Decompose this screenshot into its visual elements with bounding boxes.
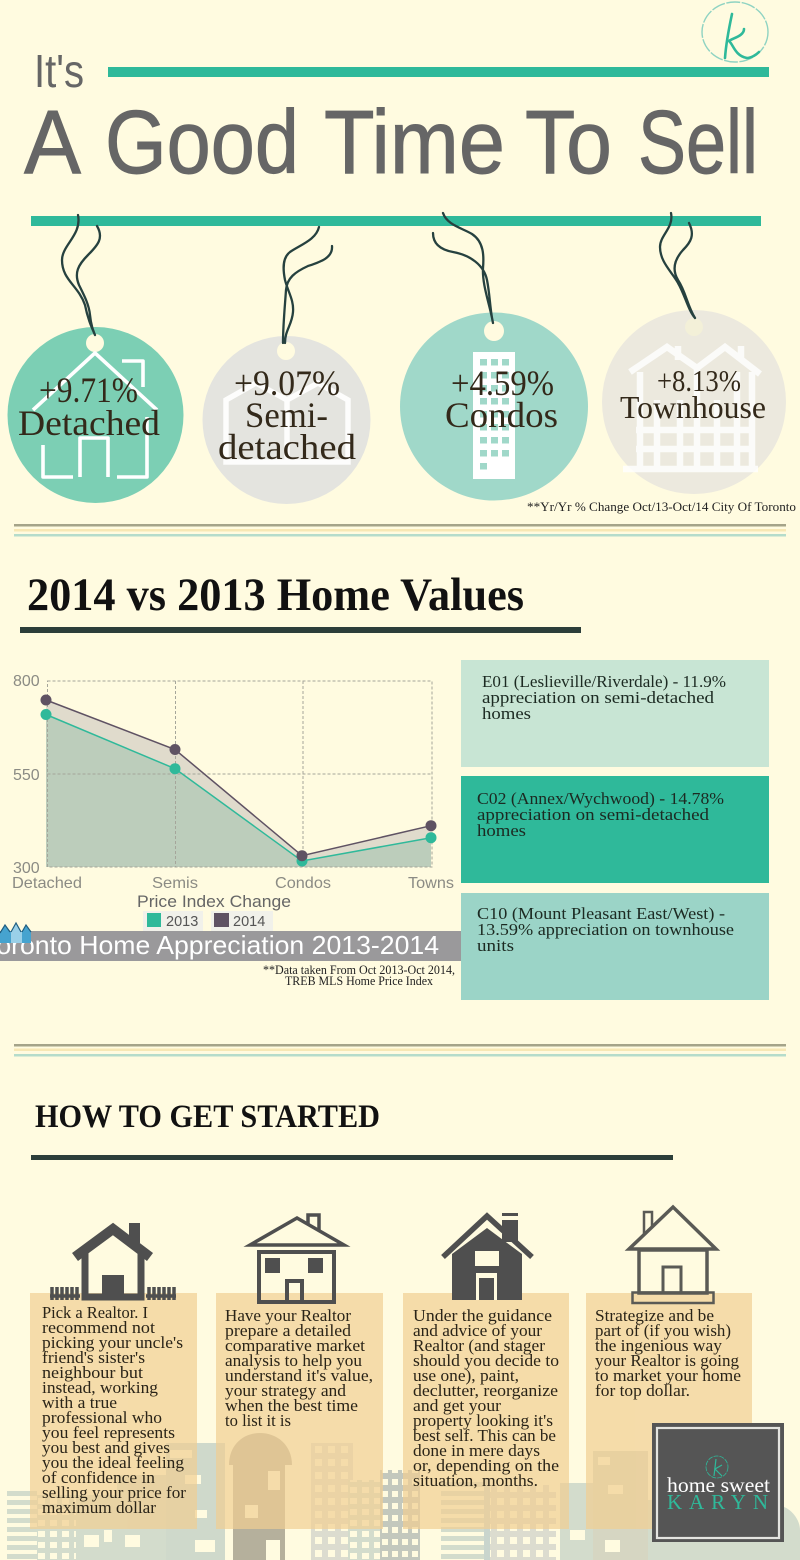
step 3 text: best self. This can be bbox=[413, 1426, 556, 1445]
step 3 text: or, depending on the bbox=[413, 1456, 559, 1475]
x axis labels: Condos bbox=[275, 875, 331, 892]
tag label bbox=[218, 363, 356, 467]
step 1 text: you feel represents bbox=[42, 1423, 175, 1442]
step 4 text: to market your home bbox=[595, 1366, 741, 1385]
step 1 text: you the ideal feeling bbox=[42, 1453, 185, 1472]
step 1 text: with a true bbox=[42, 1393, 117, 1412]
icon: townhouse row bbox=[623, 346, 760, 469]
line 2014 bbox=[46, 700, 431, 856]
legend: 2013 bbox=[166, 914, 198, 930]
step 4 text: part of (if you wish) bbox=[595, 1321, 731, 1340]
step 1 text: of confidence in bbox=[42, 1468, 156, 1487]
title: It's: It's bbox=[34, 45, 84, 97]
icon: small blue houses bbox=[0, 923, 31, 943]
logo box: home sweet Karyn bbox=[652, 1423, 784, 1542]
tag hole bbox=[86, 334, 104, 352]
step 1 text: professional who bbox=[42, 1408, 162, 1427]
title: A Good Time To Sell: Time bbox=[324, 93, 505, 193]
panel: E01: homes bbox=[482, 704, 531, 723]
step 3 text: use one), paint, bbox=[413, 1366, 519, 1385]
tag string bbox=[62, 215, 100, 335]
small k logo bbox=[706, 1456, 728, 1478]
step 4 text: the ingenious way bbox=[595, 1336, 723, 1355]
heading: How To Get Started: HOW TO GET STARTED bbox=[35, 1099, 380, 1135]
step 4 text: for top dollar. bbox=[595, 1381, 690, 1400]
step 1 text: selling your price for bbox=[42, 1483, 186, 1502]
footnote: year over year: **Yr/Yr % Change Oct/13-Oct/14 City Of Toronto bbox=[527, 500, 796, 514]
panel: C10: units bbox=[477, 936, 514, 955]
tag label: Semi- bbox=[245, 395, 328, 435]
step 1 text bbox=[42, 1303, 186, 1517]
step 2 text: Have your Realtor bbox=[225, 1306, 351, 1325]
step 1 text: Pick a Realtor. I bbox=[42, 1303, 148, 1322]
step 2 text: understand it's value, bbox=[225, 1366, 373, 1385]
tag hole bbox=[484, 321, 504, 341]
panel: C10: C10 (Mount Pleasant East/West) - bbox=[477, 904, 725, 923]
chart title: Price Index Change bbox=[137, 892, 291, 911]
legend bbox=[143, 911, 273, 931]
title: A Good Time To Sell: Good bbox=[105, 93, 299, 193]
tag disc bbox=[602, 310, 786, 494]
panel: C02: appreciation on semi-detached bbox=[477, 805, 710, 824]
step 1 text: instead, working bbox=[42, 1378, 159, 1397]
step panels backgrounds bbox=[30, 1293, 752, 1529]
step 2 text: when the best time bbox=[225, 1396, 358, 1415]
tag label bbox=[18, 370, 160, 443]
tag string bbox=[433, 213, 493, 323]
step 3 text: done in mere days bbox=[413, 1441, 540, 1460]
tag hole bbox=[685, 318, 703, 336]
y axis labels: 550 bbox=[13, 767, 40, 784]
y axis labels bbox=[13, 673, 40, 877]
icon: semi-detached house bbox=[226, 383, 348, 462]
points 2013 bbox=[40, 709, 436, 866]
heading rule bbox=[31, 1155, 673, 1160]
heading: 2014 vs 2013 Home Values: 2014 vs 2013 Home Values bbox=[27, 569, 524, 621]
footnote: data source: **Data taken From Oct 2013-Oct 2014, bbox=[263, 963, 455, 977]
title: A Good Time To Sell: Sell bbox=[638, 93, 758, 193]
panel: C02: C02 (Annex/Wychwood) - 14.78% bbox=[477, 789, 724, 808]
step 3 text bbox=[413, 1306, 559, 1490]
tag disc bbox=[400, 312, 588, 500]
icon: outlined house bbox=[629, 1207, 716, 1303]
footnote: data source: TREB MLS Home Price Index bbox=[285, 974, 434, 988]
icon: house with windows bbox=[250, 1215, 344, 1302]
step 4 text: your Realtor is going bbox=[595, 1351, 740, 1370]
points 2014 bbox=[40, 694, 436, 861]
tag label: Detached bbox=[18, 403, 160, 443]
step 3 text: declutter, reorganize bbox=[413, 1381, 558, 1400]
step 3 text: should you decide to bbox=[413, 1351, 559, 1370]
legend: 2014 bbox=[233, 914, 265, 930]
logo: k monogram bbox=[702, 2, 768, 62]
title rule bottom bbox=[31, 216, 761, 226]
step 2 text: your strategy and bbox=[225, 1381, 347, 1400]
title: A Good Time To Sell: To bbox=[525, 93, 612, 193]
tag label: Townhouse bbox=[620, 389, 766, 425]
price tag: detached bbox=[8, 215, 184, 503]
step 2 text: comparative market bbox=[225, 1336, 365, 1355]
heading rule bbox=[20, 627, 581, 633]
title rule top bbox=[108, 67, 769, 77]
step 1 text: maximum dollar bbox=[42, 1498, 156, 1517]
icon: solid house bbox=[443, 1213, 532, 1300]
x axis labels bbox=[12, 875, 454, 892]
panel: C02 bbox=[461, 776, 769, 883]
x axis labels: Semis bbox=[152, 875, 198, 892]
title: A Good Time To Sell bbox=[24, 93, 758, 193]
tag label: +4.59% bbox=[451, 363, 554, 403]
price tag: semi-detached bbox=[202, 227, 370, 504]
y axis labels: 300 bbox=[13, 860, 40, 877]
tag label bbox=[445, 363, 558, 435]
area chart: price index change bbox=[12, 673, 454, 931]
x axis labels: Towns bbox=[408, 875, 454, 892]
tag string bbox=[283, 227, 332, 343]
tag disc bbox=[202, 336, 370, 504]
tag disc bbox=[8, 327, 184, 503]
step 2 text: to list it is bbox=[225, 1411, 291, 1430]
step 3 text: situation, months. bbox=[413, 1471, 538, 1490]
tag label: Condos bbox=[445, 395, 558, 435]
step 3 text: Under the guidance bbox=[413, 1306, 552, 1325]
tag label: +9.71% bbox=[39, 370, 138, 410]
price tag: condos bbox=[400, 213, 588, 500]
step 3 text: and get your bbox=[413, 1396, 501, 1415]
tag label bbox=[620, 363, 766, 425]
step 1 text: you best and gives bbox=[42, 1438, 170, 1457]
panel: E01: appreciation on semi-detached bbox=[482, 688, 715, 707]
price tag: townhouse bbox=[602, 213, 786, 494]
area 2013 bbox=[46, 714, 431, 867]
step 3 text: and advice of your bbox=[413, 1321, 542, 1340]
panel: C02: homes bbox=[477, 821, 526, 840]
step 1 text: neighbour but bbox=[42, 1363, 143, 1382]
panel: E01: E01 (Leslieville/Riverdale) - 11.9% bbox=[482, 672, 726, 691]
line 2013 bbox=[46, 714, 431, 861]
panel: C10 bbox=[461, 893, 769, 1000]
tag label: detached bbox=[218, 427, 356, 467]
footnote: data source bbox=[263, 963, 455, 988]
icon: condo tower bbox=[473, 352, 515, 479]
step 1 text: friend's sister's bbox=[42, 1348, 145, 1367]
step 4 text: Strategize and be bbox=[595, 1306, 714, 1325]
step 1 text: picking your uncle's bbox=[42, 1333, 183, 1352]
panel: C10: 13.59% appreciation on townhouse bbox=[477, 920, 734, 939]
tag label: +9.07% bbox=[234, 363, 340, 403]
step 4 text bbox=[595, 1306, 741, 1400]
tag label: +8.13% bbox=[657, 363, 741, 398]
panel: E01 bbox=[461, 660, 769, 767]
step 1 text: recommend not bbox=[42, 1318, 155, 1337]
x axis labels: Detached bbox=[12, 875, 82, 892]
step 3 text: Realtor (and stager bbox=[413, 1336, 545, 1355]
logo box: home sweet Karyn: home sweet bbox=[667, 1473, 770, 1497]
step 3 text: property looking it's bbox=[413, 1411, 553, 1430]
step 2 text: prepare a detailed bbox=[225, 1321, 352, 1340]
tag hole bbox=[277, 342, 295, 360]
step 2 text: analysis to help you bbox=[225, 1351, 363, 1370]
grid lines bbox=[48, 681, 432, 867]
logo box: home sweet Karyn: KARYN bbox=[667, 1490, 768, 1514]
skyline illustration bbox=[7, 1433, 800, 1560]
tag string bbox=[660, 213, 695, 318]
step 2 text bbox=[225, 1306, 373, 1430]
icon: house with fence bbox=[50, 1223, 176, 1300]
icon: detached house bbox=[33, 353, 157, 477]
title: A Good Time To Sell: A bbox=[24, 93, 81, 193]
y axis labels: 800 bbox=[13, 673, 40, 690]
area 2014 bbox=[46, 700, 431, 867]
